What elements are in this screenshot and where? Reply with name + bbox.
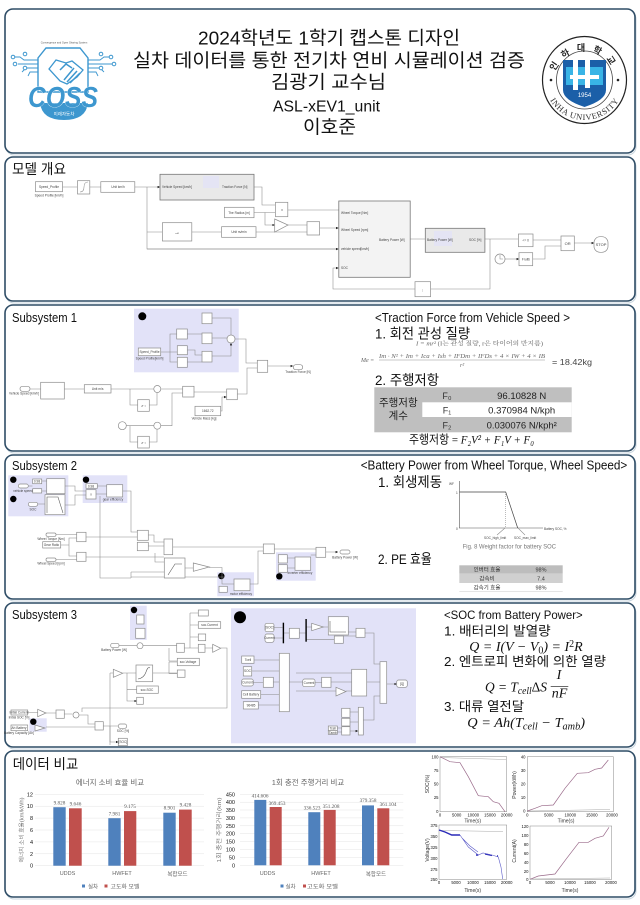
- formula: equivalent mass: Me =: [360, 358, 374, 364]
- title text: ASL-xEV1_unit: [273, 98, 381, 116]
- chart: power over time: 15000: [586, 812, 598, 818]
- text: SOC equations: amb: [563, 722, 580, 732]
- chart: single-charge range comparison: 250: [226, 824, 235, 830]
- table: PE efficiency: 98%: [535, 586, 547, 592]
- table: driving resistance coefficients: [374, 387, 572, 432]
- diagram: SOC model: [SOC]: [118, 740, 127, 744]
- block: SOC subsystem: Battery Power [W]: [427, 238, 453, 242]
- diagram: battery power model: 0.98: [34, 480, 40, 484]
- text: SOC equations: 3. 대류 열전달: [444, 699, 524, 714]
- title text: 이호준: [303, 116, 356, 138]
- block: speed profile: [35, 182, 63, 198]
- text: traction force explanation: <Traction Force from Vehicle Speed >: [375, 310, 570, 325]
- chart: SOC over time: 100: [432, 754, 439, 760]
- chart: weight factor for battery SOC: 1: [456, 491, 458, 495]
- chart: energy efficiency comparison: 0: [30, 864, 33, 870]
- table: driving resistance coefficients: 0.030076 N/kph²: [487, 420, 557, 432]
- diagram: traction force model: Traction Force [N]: [285, 370, 311, 374]
- chart: energy efficiency comparison: 10: [27, 804, 33, 810]
- chart: power over time: 20000: [606, 812, 618, 818]
- chart: SOC over time: [425, 754, 513, 824]
- heading: subsystem 3: Subsystem 3: [12, 607, 77, 622]
- diagram: top-level Simulink model: <= 0: [523, 238, 529, 242]
- diagram: heat calculation detail: Current: [264, 636, 275, 640]
- diagram: top-level Simulink model: Unit rs/min: [231, 230, 247, 234]
- chart: weight factor for battery SOC: SOC_high_limit: [484, 536, 506, 540]
- chart: current over time: 5000: [545, 880, 555, 885]
- chart: SOC over time: 0: [436, 809, 439, 814]
- diagram: traction force model: [9, 309, 311, 448]
- chart: single-charge range comparison: 50: [229, 855, 235, 861]
- diagram: SOC model: Initial Current: [10, 710, 29, 714]
- chart: power over time: 40: [521, 754, 526, 760]
- chart: single-charge range comparison: 414.606: [252, 794, 269, 800]
- table: driving resistance coefficients: F₁: [443, 406, 451, 416]
- icon: Inha University seal: 1954: [578, 93, 592, 99]
- diagram: SOC model: [4, 606, 227, 746]
- chart: energy efficiency comparison: [18, 777, 204, 890]
- diagram: heat calculation detail: [SOC]: [265, 626, 274, 630]
- chart: SOC over time: 50: [434, 782, 439, 786]
- chart: energy efficiency comparison: 9.646: [70, 802, 82, 808]
- block: traction force subsystem: [160, 174, 254, 200]
- diagram: traction force model: z⁻¹: [141, 441, 146, 445]
- diagram: SOC model: Initial SOC [%]: [9, 716, 29, 720]
- diagram: SOC model: Battery Power [W]: [101, 648, 127, 652]
- table: PE efficiency: 98%: [535, 568, 547, 574]
- icon: COSS logo: COSS: [28, 82, 99, 114]
- diagram: traction force model: z⁻¹: [141, 404, 146, 408]
- diagram: battery power model: x: [90, 492, 92, 496]
- text: traction force explanation: [375, 310, 570, 348]
- icon: Inha University seal: [542, 36, 628, 124]
- text: SOC equations: Q = T: [485, 680, 519, 696]
- chart: energy efficiency comparison: 실차: [88, 882, 98, 890]
- chart: energy efficiency comparison: 6: [30, 828, 33, 834]
- panel: subsystem 2: [5, 455, 636, 601]
- chart: power over time: Time(s): [558, 818, 575, 824]
- chart: current over time: 0: [529, 880, 532, 885]
- text: SOC equations: S: [540, 680, 547, 696]
- diagram: battery power model: vehicle speed: [13, 489, 33, 493]
- text: traction force explanation: I = mr² (I는 관성 질량, r은 타이어의 반지름): [415, 340, 543, 348]
- diagram: traction force model: Speed Profile[km/h]: [136, 356, 164, 360]
- chart: single-charge range comparison: 369.453: [269, 801, 286, 807]
- text: SOC equations: cell: [523, 722, 538, 732]
- chart: single-charge range comparison: 361.104: [380, 802, 397, 808]
- formula: equivalent mass: [360, 353, 592, 369]
- diagram: heat calculation detail: Cell Battery: [243, 692, 260, 696]
- chart: current over time: 80: [524, 842, 529, 847]
- diagram: heat calculation detail: Tcell: [245, 658, 251, 662]
- chart: voltage over time: 375: [430, 823, 438, 828]
- chart: energy efficiency comparison: 에너지 소비 효율(km/kWh): [18, 797, 26, 862]
- chart: power over time: 0: [523, 808, 526, 814]
- chart: weight factor for battery SOC: WF: [449, 482, 454, 486]
- chart: weight factor for battery SOC: 0: [456, 527, 458, 531]
- heading: regenerative braking: 1. 회생제동: [378, 474, 442, 490]
- diagram: heat calculation detail: Tcell: [330, 726, 336, 730]
- diagram: battery power model: 0.98: [88, 484, 94, 488]
- table: PE efficiency: 인버터 효율: [474, 566, 500, 574]
- heading: data comparison: 데이터 비교: [13, 756, 78, 772]
- block: traction force subsystem: Vehicle Speed [km/h]: [162, 185, 192, 189]
- table: driving resistance coefficients: F₀: [442, 391, 452, 401]
- heading: PE efficiency: 2. PE 효율: [378, 551, 432, 567]
- block: SOC subsystem: [425, 228, 485, 252]
- chart: current over time: 100: [522, 833, 529, 838]
- chart: voltage over time: 250: [430, 877, 438, 882]
- chart: single-charge range comparison: 복합모드: [366, 870, 386, 878]
- chart: voltage over time: 10000: [467, 880, 479, 885]
- diagram: battery power model: [8, 475, 358, 596]
- block: battery power subsystem: vehicle speed[km/h]: [341, 247, 369, 251]
- diagram: heat calculation detail: [231, 608, 416, 743]
- chart: energy efficiency comparison: HWFET: [112, 871, 132, 877]
- icon: COSS logo: 미래자동차: [54, 110, 75, 118]
- table: PE efficiency: 감속기 효율: [474, 584, 500, 592]
- chart: power over time: 5000: [544, 812, 554, 818]
- diagram: battery power model: motor efficiency: [230, 592, 253, 596]
- diagram: top-level Simulink model: →: [174, 230, 180, 236]
- chart: current over time: 40: [524, 860, 529, 865]
- chart: current over time: 15000: [584, 880, 596, 885]
- diagram: heat calculation detail: [Q]: [400, 682, 404, 686]
- diagram: top-level Simulink model: STOP: [596, 242, 607, 247]
- diagram: top-level Simulink model: x: [281, 208, 283, 212]
- heading: driving resistance: 2. 주행저항: [375, 372, 439, 388]
- diagram: SOC model: SOC [%]: [117, 729, 129, 733]
- panel: model overview: [5, 157, 636, 303]
- text: SOC equations: Q = I(V − V: [469, 640, 538, 655]
- chart: current over time: Time(s): [562, 888, 579, 894]
- chart: single-charge range comparison: 1회 충전 주행거리(km): [215, 797, 223, 862]
- block: battery power subsystem: Wheel Speed [rpm]: [341, 228, 368, 232]
- heading: subsystem 1: Subsystem 1: [12, 310, 77, 325]
- chart: energy efficiency comparison: 9.428: [180, 802, 192, 808]
- icon: Inha University seal: 인하대학교: [550, 43, 616, 70]
- text: SOC equations: Q = Ah(T: [467, 716, 522, 731]
- chart: voltage over time: 350: [430, 834, 438, 839]
- chart: current over time: 20000: [605, 880, 617, 885]
- text: SOC equations: nF: [552, 686, 568, 702]
- panel: title header: [4, 8, 636, 156]
- icon: COSS logo: Convergence and Open Sharing System: [41, 40, 87, 44]
- diagram: battery power model: Wheel Torque [Nm]: [37, 537, 65, 541]
- chart: power over time: 0: [526, 812, 529, 818]
- block: SOC subsystem: SOC [%]: [469, 238, 482, 242]
- panel: data comparison: [5, 751, 636, 899]
- diagram: top-level Simulink model: [35, 174, 608, 297]
- diagram: battery power model: gear efficiency: [103, 498, 124, 502]
- diagram: top-level Simulink model: Unit km/h: [111, 185, 125, 189]
- chart: voltage over time: 5000: [451, 880, 461, 885]
- chart: single-charge range comparison: HWFET: [311, 871, 331, 877]
- text: SOC equations: − T: [538, 716, 564, 731]
- chart: energy efficiency comparison: 12: [27, 792, 33, 798]
- chart: SOC over time: SOC(%): [425, 774, 431, 793]
- chart: SOC over time: 25: [434, 795, 439, 800]
- chart: energy efficiency comparison: UDDS: [60, 871, 76, 877]
- chart: SOC over time: 0: [439, 812, 442, 818]
- table: driving resistance coefficients: 주행저항: [379, 397, 418, 409]
- title text: [133, 28, 525, 138]
- diagram: traction force model: 1662.72: [202, 409, 214, 413]
- heading: model overview: 모델 개요: [12, 161, 66, 177]
- chart: voltage over time: Time(s): [464, 888, 481, 894]
- block: battery power subsystem: SOC: [341, 266, 349, 270]
- formula: equivalent mass: = 18.42kg: [552, 357, 592, 367]
- chart: voltage over time: 300: [430, 856, 438, 861]
- text: SOC equations: R: [573, 640, 583, 655]
- chart: energy efficiency comparison: 4: [30, 840, 33, 846]
- chart: single-charge range comparison: UDDS: [260, 871, 276, 877]
- chart: current over time: 20: [524, 869, 529, 874]
- chart: single-charge range comparison: 350: [226, 808, 235, 814]
- diagram: SOC model: Battery Capacity [Ah]: [4, 731, 34, 735]
- diagram: battery power model: Gear Ratio: [44, 543, 59, 547]
- title text: 2024학년도 1학기 캡스톤 디자인: [198, 28, 460, 48]
- chart: energy efficiency comparison: 8.901: [164, 806, 176, 812]
- chart: energy efficiency comparison: 에너지 소비 효율 비교: [76, 777, 144, 787]
- diagram: heat calculation detail: SOC: [244, 669, 252, 673]
- table: PE efficiency: [459, 565, 563, 592]
- chart: current over time: [512, 824, 617, 894]
- chart: single-charge range comparison: [215, 777, 403, 890]
- panel: subsystem 3: [4, 603, 636, 749]
- chart: current over time: Current(A): [512, 839, 518, 863]
- chart: voltage over time: 15000: [484, 880, 496, 885]
- diagram: top-level Simulink model: Fruitb: [522, 258, 530, 262]
- diagram: battery power model: SOC: [30, 508, 37, 512]
- diagram: SOC model: soc.Voltage: [180, 660, 196, 664]
- table: driving resistance coefficients: 0.370984 N/kph: [488, 406, 555, 416]
- panel: subsystem 1: [5, 305, 636, 453]
- chart: current over time: 60: [524, 851, 529, 856]
- diagram: top-level Simulink model: The Radius [m]: [228, 211, 250, 215]
- chart: current over time: 10000: [564, 880, 576, 885]
- block: traction force subsystem: Traction Force [N]: [222, 185, 248, 189]
- text: SOC equations: [444, 608, 606, 732]
- chart: single-charge range comparison: 300: [226, 816, 235, 822]
- text: SOC equations: ): [579, 716, 585, 731]
- diagram: heat calculation detail: Current: [242, 680, 253, 684]
- chart: voltage over time: Voltage(V): [425, 838, 431, 862]
- chart: voltage over time: 0: [438, 880, 441, 885]
- diagram: top-level Simulink model: OR: [565, 241, 571, 246]
- chart: single-charge range comparison: 351.208: [323, 804, 340, 810]
- table: driving resistance coefficients: F₂: [442, 420, 452, 430]
- diagram: battery power model: Battery Power [W]: [332, 556, 358, 560]
- chart: single-charge range comparison: 150: [226, 840, 235, 846]
- chart: energy efficiency comparison: 고도화 모델: [110, 882, 140, 890]
- chart: power over time: Power(kWh): [512, 771, 518, 799]
- text: SOC equations: I: [556, 668, 563, 683]
- diagram: battery power model: Wheel Speed [rpm]: [37, 562, 65, 566]
- chart: current over time: 0: [526, 877, 529, 882]
- diagram: SOC model: soc.Current: [201, 623, 218, 627]
- diagram: SOC model: Ah Battery: [12, 726, 27, 730]
- chart: SOC over time: 10000: [467, 812, 480, 818]
- chart: voltage over time: [425, 823, 513, 894]
- chart: single-charge range comparison: 400: [226, 800, 235, 806]
- block: speed profile: Speed Profile [km/h]: [35, 194, 63, 198]
- diagram: traction force model: Vehicle Mass [kg]: [192, 416, 217, 420]
- chart: energy efficiency comparison: 2: [30, 852, 33, 858]
- diagram: traction force model: Speed_Profile: [139, 350, 160, 354]
- text: SOC equations: ) = I: [542, 640, 570, 655]
- text: SOC equations: 1. 배터리의 발열량: [444, 624, 551, 638]
- chart: power over time: 20: [521, 782, 526, 786]
- chart: SOC over time: 75: [434, 768, 439, 773]
- chart: energy efficiency comparison: 7.981: [109, 812, 121, 818]
- block: battery power subsystem: Wheel Torque [Nm]: [341, 211, 368, 215]
- icon: Inha University seal: INHA UNIVERSITY: [550, 98, 618, 120]
- formula: driving resistance: 주행저항 = F₂V² + F₁V + F₀: [409, 432, 534, 446]
- chart: single-charge range comparison: 200: [226, 832, 235, 838]
- diagram: top-level Simulink model: ⋮: [421, 288, 424, 292]
- text: SOC equations: 2: [569, 639, 574, 650]
- table: PE efficiency: 감속비: [479, 574, 495, 582]
- chart: energy efficiency comparison: 복합모드: [167, 870, 188, 878]
- formula: equivalent mass: r²: [460, 363, 464, 369]
- block: speed profile: Speed_Profile: [39, 185, 59, 189]
- heading: subsystem 2: Subsystem 2: [12, 458, 77, 473]
- text: SOC equations: Δ: [532, 680, 540, 696]
- chart: power over time: 10000: [564, 812, 577, 818]
- block: battery power subsystem: Battery Power [W]: [379, 238, 405, 242]
- diagram: battery power model: inverter efficiency: [288, 571, 313, 575]
- text: SOC equations: 2. 엔트로피 변화에 의한 열량: [444, 654, 606, 669]
- chart: weight factor for battery SOC: Battery SOC, %: [544, 527, 567, 531]
- text: SOC equations: 0: [538, 646, 543, 656]
- text: traction force explanation: 1. 회전 관성 질량: [375, 326, 470, 342]
- chart: single-charge range comparison: 336.523: [304, 806, 321, 812]
- chart: current over time: 120: [522, 824, 529, 829]
- block: battery power subsystem: [339, 201, 410, 277]
- chart: single-charge range comparison: 고도화 모델: [307, 882, 338, 890]
- chart: single-charge range comparison: 450: [226, 792, 235, 798]
- chart: single-charge range comparison: 0: [232, 863, 235, 869]
- diagram: SOC model: soc.SOC: [141, 688, 154, 692]
- text: SOC equations: cell: [518, 686, 532, 697]
- chart: energy efficiency comparison: 9.828: [54, 800, 66, 806]
- chart: single-charge range comparison: 100: [226, 848, 235, 854]
- table: driving resistance coefficients: 계수: [389, 410, 408, 422]
- diagram: traction force model: Vehicle Speed [km/h]: [9, 392, 39, 396]
- chart: power over time: 10: [521, 795, 526, 800]
- chart: energy efficiency comparison: 8: [30, 816, 33, 822]
- title text: 실차 데이터를 통한 전기차 연비 시뮬레이션 검증: [133, 50, 525, 71]
- chart: weight factor for battery SOC: SOC_max_limit: [514, 536, 536, 540]
- chart: single-charge range comparison: 379.358: [360, 798, 377, 804]
- chart: SOC over time: Time(s): [464, 818, 481, 824]
- diagram: heat calculation detail: 96485: [247, 704, 256, 708]
- chart: SOC over time: 15000: [484, 812, 496, 818]
- chart: weight factor for battery SOC: Fig. 8 Weight factor for battery SOC: [463, 544, 557, 550]
- diagram: heat calculation detail: Current: [304, 681, 314, 685]
- chart: SOC over time: 5000: [452, 812, 462, 818]
- chart: single-charge range comparison: 1회 충전 주행거리 비교: [272, 777, 344, 787]
- chart: voltage over time: 325: [430, 845, 438, 850]
- chart: voltage over time: 275: [430, 867, 438, 872]
- chart: energy efficiency comparison: 9.175: [124, 804, 136, 810]
- title text: 김광기 교수님: [271, 72, 386, 92]
- icon: COSS logo: [11, 40, 116, 120]
- table: driving resistance coefficients: 96.10828 N: [497, 391, 546, 402]
- chart: single-charge range comparison: 실차: [285, 882, 296, 890]
- chart: voltage over time: 20000: [501, 880, 513, 885]
- chart: power over time: 30: [521, 768, 526, 773]
- diagram: heat calculation detail: Tamb: [329, 731, 337, 735]
- table: PE efficiency: 7.4: [537, 576, 545, 582]
- chart: SOC over time: 20000: [501, 812, 513, 818]
- chart: power over time: [512, 754, 618, 824]
- diagram: traction force model: Unit m/s: [92, 387, 104, 391]
- formula: equivalent mass: Im · N² + Im + Ica + Ish + IFDm + IFDs + 4 × IW + 4 × IB: [378, 353, 545, 360]
- chart: weight factor for battery SOC: [449, 481, 567, 550]
- text: SOC equations: <SOC from Battery Power>: [444, 608, 583, 622]
